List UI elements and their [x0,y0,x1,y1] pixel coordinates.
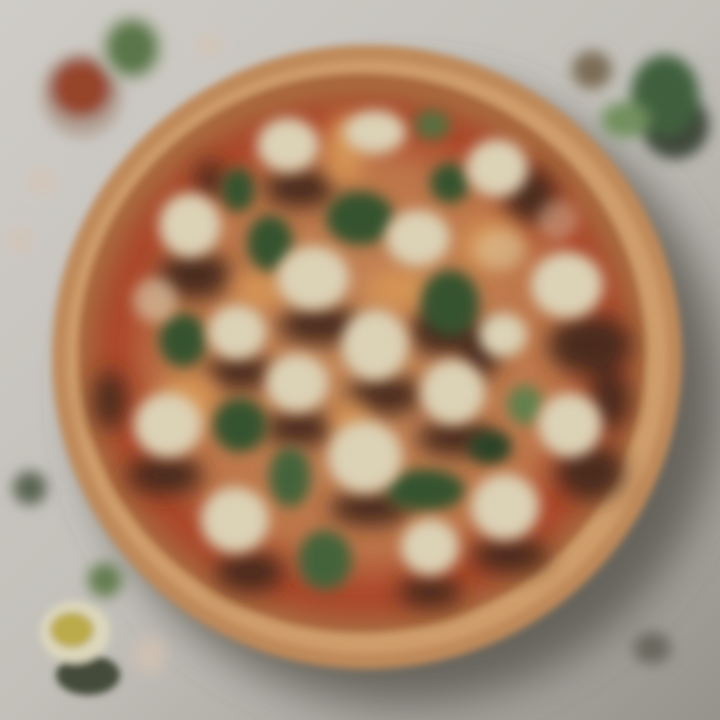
side item: brown spice [572,51,612,89]
pizza [52,45,682,669]
pizza cast shadow [84,80,720,704]
side item: small herb leaves [13,471,671,664]
side item: basil bunch top right [601,55,709,159]
dark toppings under cheese [94,160,632,608]
green basil leaves [159,110,543,590]
side item: red sauce bowl [42,53,122,137]
orange melted highlights [162,114,520,438]
mozzarella blobs [133,110,603,575]
side item: scattered crumbs [8,35,224,673]
sauce base [90,94,634,622]
side item: green herb bowl [101,15,163,81]
crust [52,45,682,669]
side item: lemon slice [40,601,120,695]
